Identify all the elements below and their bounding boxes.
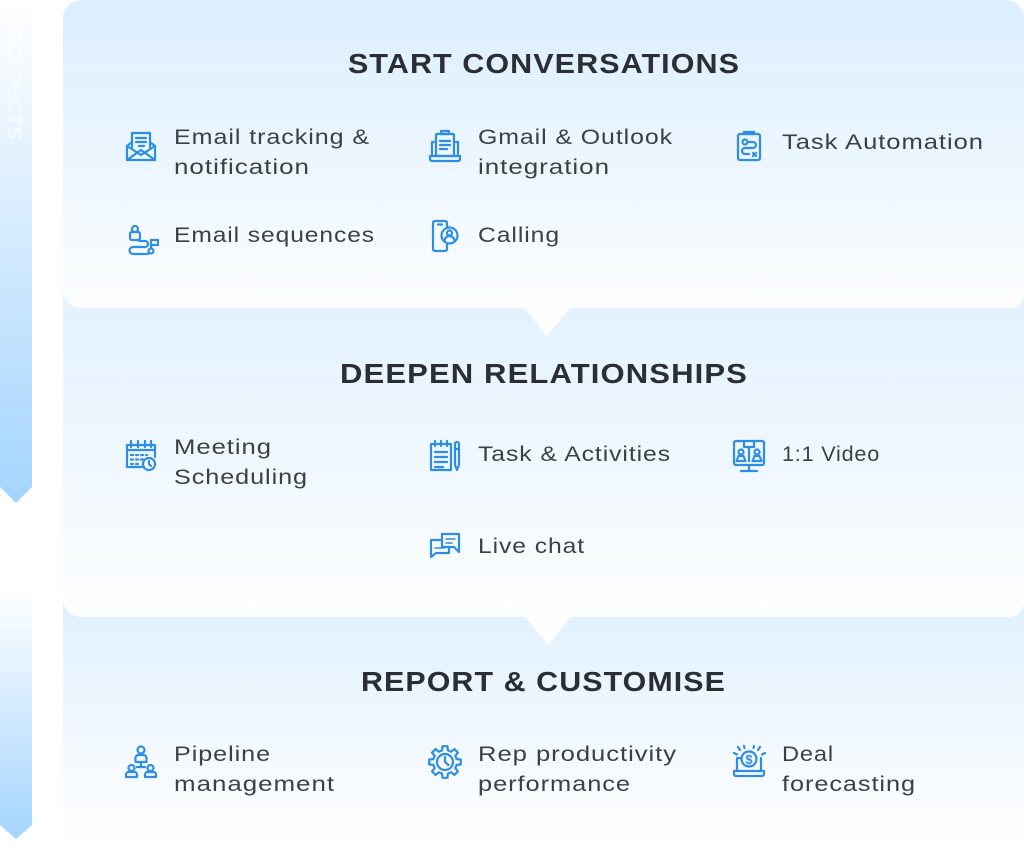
icon: org people xyxy=(126,746,156,777)
item: live chat xyxy=(431,534,585,558)
item: video xyxy=(734,441,880,471)
icon: phone contact xyxy=(433,221,458,251)
item: gmail and outlook xyxy=(430,125,673,179)
item: email tracking: Email tracking & xyxy=(174,125,370,149)
item: rep productivity: performance xyxy=(478,772,631,796)
item: gmail and outlook: Gmail & Outlook xyxy=(478,125,673,149)
panel: report and customise xyxy=(63,600,1024,848)
item: deal forecasting xyxy=(734,742,916,796)
heading: deepen relationships: DEEPEN RELATIONSHIPS xyxy=(340,358,748,389)
item: pipeline management: Pipeline xyxy=(174,742,271,766)
heading: report and customise: REPORT & CUSTOMISE xyxy=(361,666,726,697)
item: rep productivity xyxy=(429,742,677,796)
left arrow: prospects funnel top xyxy=(0,0,32,503)
item: pipeline management: management xyxy=(174,772,335,796)
item: meeting scheduling: Scheduling xyxy=(174,465,308,489)
icon: calendar clock xyxy=(127,441,155,470)
item: deal forecasting: Deal xyxy=(782,742,834,766)
label: prospects: PROSPECTS xyxy=(3,15,26,140)
item: rep productivity: Rep productivity xyxy=(478,742,677,766)
item: calling: Calling xyxy=(478,223,560,247)
item: meeting scheduling xyxy=(127,435,308,489)
panel: deepen relationships xyxy=(63,290,1024,645)
item: gmail and outlook: integration xyxy=(478,155,610,179)
item: task automation xyxy=(738,130,984,160)
icon: clipboard laptop xyxy=(430,131,460,161)
item: email sequences: Email sequences xyxy=(174,223,375,247)
item: meeting scheduling: Meeting xyxy=(174,435,272,459)
icon: dollar laptop: $ xyxy=(745,752,753,767)
icon: open envelope xyxy=(127,133,155,160)
icon: notebook pencil xyxy=(431,441,459,470)
icon: dollar laptop xyxy=(734,746,765,776)
heading: start conversations: START CONVERSATIONS xyxy=(348,48,740,79)
left arrow: lower stage xyxy=(0,590,32,839)
icon: clipboard flow xyxy=(738,132,760,160)
item: live chat: Live chat xyxy=(478,534,585,558)
icon: route flag xyxy=(130,226,158,254)
item: video: 1:1 Video xyxy=(782,442,880,466)
item: task and activities: Task & Activities xyxy=(478,442,671,466)
item: email tracking: notification xyxy=(174,155,310,179)
item: email tracking xyxy=(127,125,370,179)
item: task and activities xyxy=(431,441,671,470)
item: email sequences xyxy=(130,223,375,254)
item: deal forecasting: forecasting xyxy=(782,772,916,796)
panel: start conversations xyxy=(63,0,1024,336)
icon: chat bubbles xyxy=(431,534,459,557)
item: pipeline management xyxy=(126,742,335,796)
item: task automation: Task Automation xyxy=(782,130,984,154)
item: calling xyxy=(433,221,560,251)
icon: gear clock xyxy=(429,746,461,778)
icon: video monitor xyxy=(734,441,764,471)
